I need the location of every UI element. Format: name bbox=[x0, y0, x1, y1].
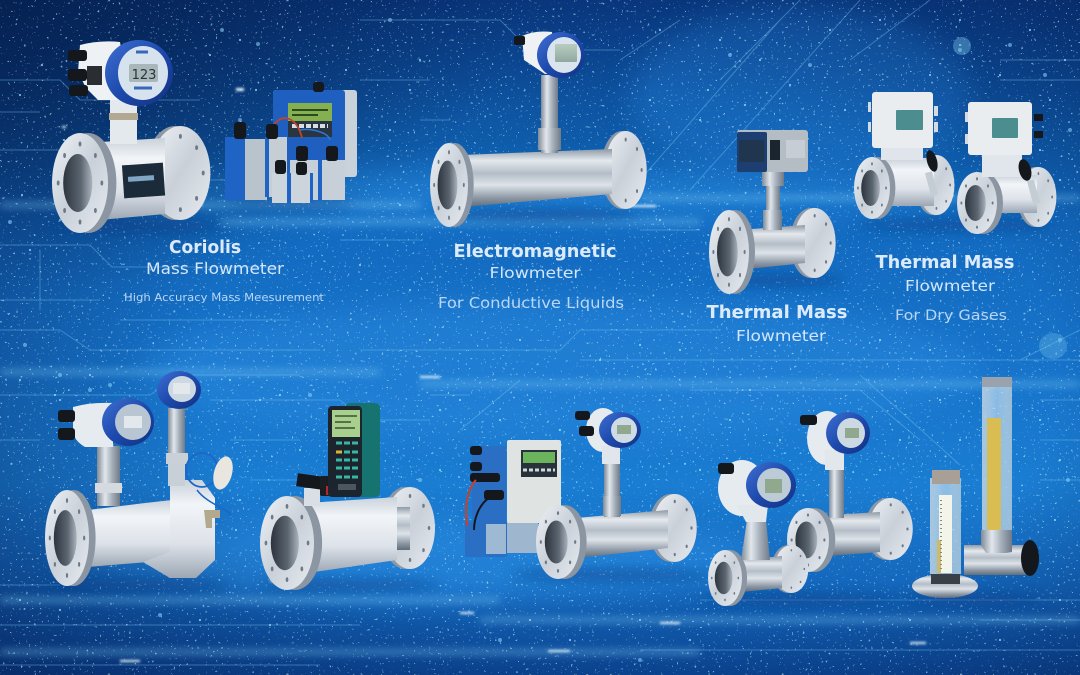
heading: Electromagnetic: Electromagnetic bbox=[454, 241, 616, 262]
panel: thermal mass flowmeter with box transmitter bbox=[706, 130, 848, 345]
icon: remote electronics box with stainless flowmeter bbox=[465, 408, 697, 579]
icon: stainless thermal flowmeter bbox=[709, 130, 836, 294]
icon: white gas meter B bbox=[957, 102, 1056, 234]
text: Flowmeter: Flowmeter bbox=[736, 327, 827, 345]
icon: pair of blue-head insertion flowmeters bbox=[708, 411, 913, 606]
icon: white Coriolis flow tube bbox=[52, 40, 210, 233]
text: For Dry Gases: For Dry Gases bbox=[895, 308, 1007, 324]
icon: ultrasonic flowmeter with handheld reader bbox=[260, 403, 435, 590]
panel: Coriolis mass flowmeter bbox=[52, 40, 357, 304]
text: Flowmeter: Flowmeter bbox=[905, 277, 996, 295]
icon: blue control unit with sensor boxes bbox=[225, 82, 357, 203]
heading: Thermal Mass: Thermal Mass bbox=[876, 252, 1014, 273]
panel: thermal mass flowmeter for dry gases bbox=[854, 92, 1056, 324]
text: Mass Flowmeter: Mass Flowmeter bbox=[146, 259, 284, 278]
text: High Accuracy Mass Meesurement: High Accuracy Mass Meesurement bbox=[124, 291, 325, 304]
icon: white gas meter A bbox=[854, 92, 954, 219]
icon: glass tube variable-area rotameters bbox=[912, 377, 1039, 598]
text: Flowmeter: Flowmeter bbox=[490, 264, 581, 282]
heading: Thermal Mass: Thermal Mass bbox=[706, 302, 848, 323]
icon: stainless insertion flowmeter bbox=[430, 32, 647, 227]
text: For Conductive Liquids: For Conductive Liquids bbox=[438, 294, 624, 312]
icon: white Coriolis flow tube: 123 bbox=[132, 68, 156, 83]
icon: dual-transmitter vortex flowmeter bbox=[45, 371, 236, 586]
panel: electromagnetic flowmeter bbox=[430, 32, 647, 312]
heading: Coriolis: Coriolis bbox=[169, 237, 241, 258]
